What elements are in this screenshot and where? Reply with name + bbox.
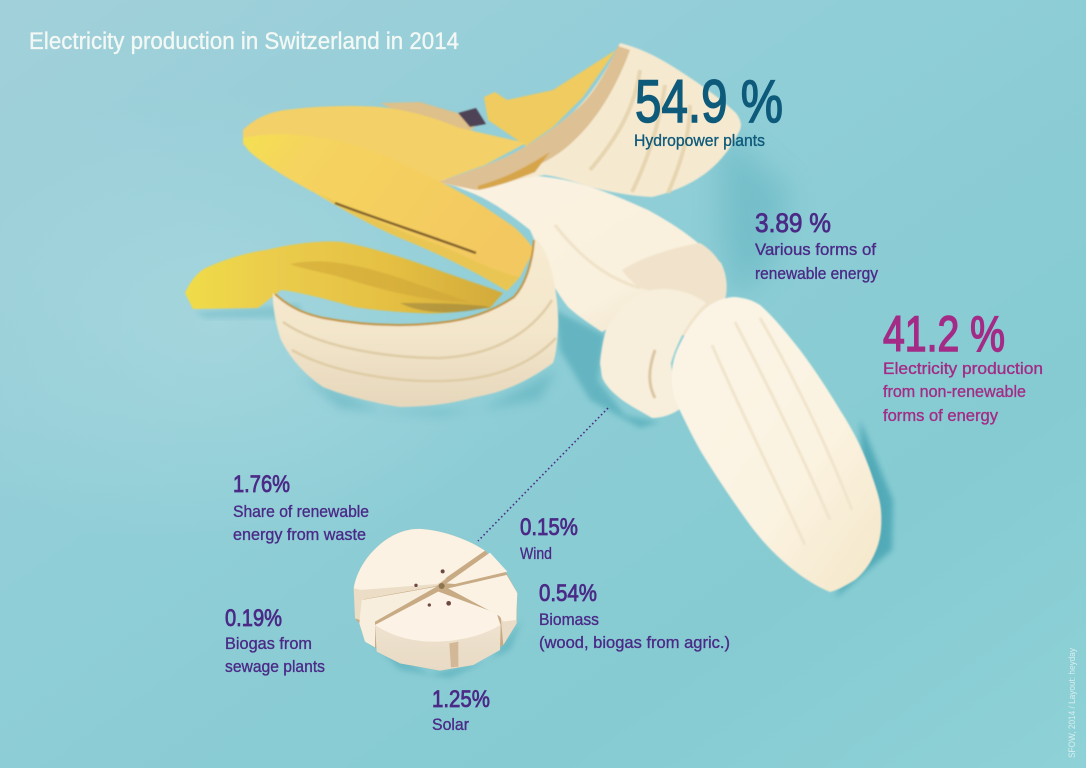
banana body — [440, 176, 727, 345]
stat: various renewable — [755, 208, 878, 283]
wedge: solar — [375, 592, 501, 671]
stat: waste: Share of renewable — [233, 502, 369, 521]
stat: wind — [520, 514, 578, 563]
peel: big yellow flap — [243, 106, 534, 291]
stat: various renewable: renewable energy — [755, 264, 878, 283]
stat: solar: 1.25% — [432, 686, 490, 713]
stat: waste — [233, 471, 369, 544]
seed marks — [414, 569, 451, 607]
disk base — [354, 529, 517, 671]
stat: non-renewable: Electricity production — [883, 359, 1043, 378]
stat: non-renewable — [883, 306, 1043, 425]
stat: solar: Solar — [432, 715, 469, 734]
dotted leader line — [478, 408, 608, 541]
stat: waste: 1.76% — [233, 471, 290, 498]
peel: upper inner yellow — [484, 50, 616, 146]
stat: waste: energy from waste — [233, 525, 366, 544]
stat: solar — [432, 686, 490, 734]
wedge: biomass — [448, 575, 517, 645]
stat: hydropower: Hydropower plants — [634, 131, 765, 150]
wedge: wind — [447, 553, 507, 584]
stat: wind: 0.15% — [520, 514, 578, 541]
stat: hydropower — [634, 68, 783, 150]
stat: various renewable: 3.89 % — [755, 208, 831, 238]
stat: biomass: (wood, biogas from agric.) — [539, 633, 730, 652]
shadows beneath banana — [195, 130, 893, 678]
peel: lower white loop — [273, 237, 558, 407]
stat: non-renewable: 41.2 % — [883, 306, 1005, 362]
stat: non-renewable: from non-renewable — [883, 382, 1026, 401]
stat: sewage biogas — [225, 605, 325, 676]
stat: biomass — [539, 580, 730, 652]
wedge: sewage — [359, 587, 437, 647]
wedge: waste — [354, 529, 485, 620]
peel: lower left yellow strip — [185, 241, 503, 313]
stat: various renewable: Various forms of — [755, 240, 876, 259]
illustration: cut banana slice pie — [354, 529, 517, 671]
title: Electricity production in Switzerland in 2014 — [29, 28, 459, 55]
stat: biomass: Biomass — [539, 610, 599, 629]
stat: hydropower: 54.9 % — [635, 68, 783, 135]
banana slice — [600, 289, 706, 418]
stat: sewage biogas: 0.19% — [225, 605, 282, 632]
stat: sewage biogas: Biogas from — [225, 634, 312, 653]
credit: SFOW, 2014 / Layout: heyday — [1067, 648, 1078, 758]
stat: sewage biogas: sewage plants — [225, 657, 325, 676]
banana lower half — [672, 297, 881, 592]
illustration: peeled banana — [185, 43, 881, 592]
stat: biomass: 0.54% — [539, 580, 597, 607]
peel: upper white flap — [438, 43, 741, 197]
stat: wind: Wind — [520, 544, 552, 563]
stat: non-renewable: forms of energy — [883, 406, 998, 425]
peel: back piece — [380, 102, 486, 132]
